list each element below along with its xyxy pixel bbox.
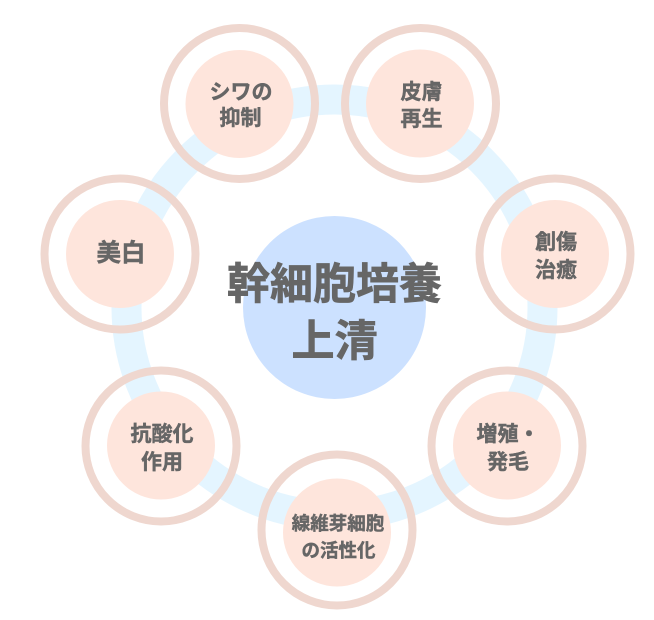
node: antioxidant action	[86, 370, 236, 522]
connecting ring	[126, 100, 542, 516]
label: proliferation and hair growth: 発毛	[487, 451, 529, 474]
node: proliferation and hair growth	[432, 370, 582, 522]
node: fibroblast activation	[262, 454, 412, 606]
node: whitening	[44, 178, 196, 330]
label: wrinkle suppression: 抑制	[220, 107, 262, 130]
label: wound healing: 創傷	[535, 231, 577, 254]
label: fibroblast activation: の活性化	[301, 540, 376, 561]
node: wound healing	[480, 178, 630, 330]
central title: 上清	[292, 318, 378, 366]
label: antioxidant action: 作用	[141, 451, 183, 474]
node: skin regeneration	[345, 28, 496, 179]
central circle: stem cell culture supernatant	[227, 216, 442, 399]
label: wound healing: 治癒	[535, 259, 577, 282]
label: skin regeneration: 再生	[400, 108, 442, 131]
label: proliferation and hair growth: 増殖・	[476, 423, 540, 446]
central title: 幹細胞培養	[227, 261, 442, 309]
label: skin regeneration: 皮膚	[400, 81, 442, 104]
label: whitening: 美白	[96, 239, 146, 267]
label: antioxidant action: 抗酸化	[130, 423, 194, 446]
node: wrinkle suppression	[164, 28, 315, 179]
label: fibroblast activation: 線維芽細胞	[292, 513, 385, 534]
label: wrinkle suppression: シワの	[210, 81, 272, 104]
